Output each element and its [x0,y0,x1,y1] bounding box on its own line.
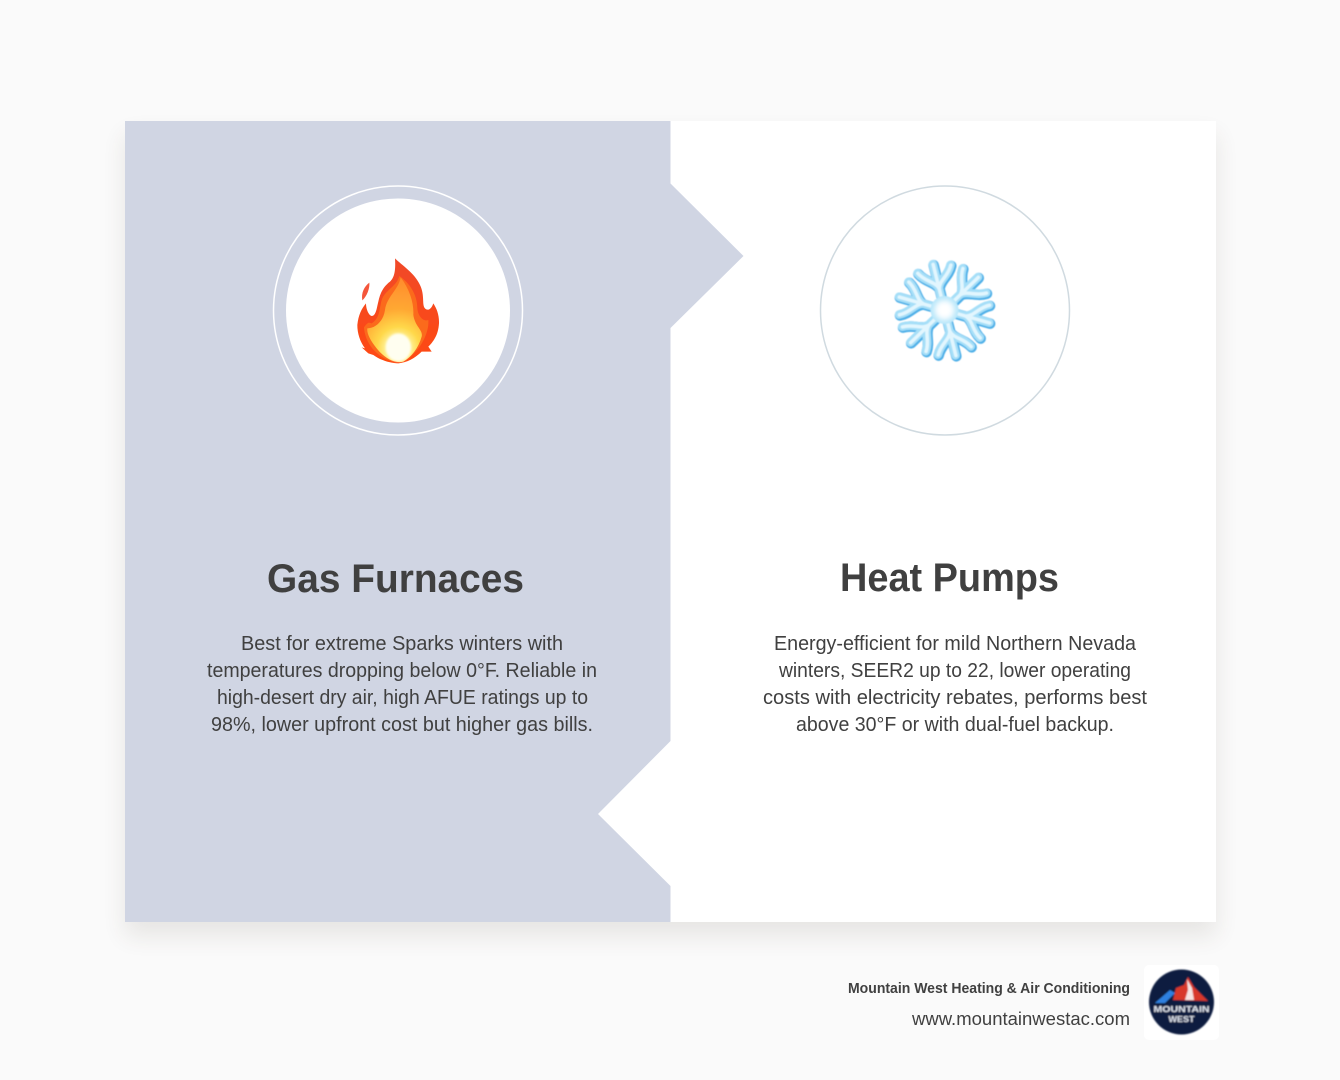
text block: heat pumps description: costs with electricity rebates, performs best [763,687,1147,709]
text block: gas furnaces description: temperatures dropping below 0°F. Reliable in [207,660,597,682]
panel: heat pumps background [125,121,1216,922]
text block: heat pumps description: above 30°F or with dual-fuel backup. [796,714,1114,736]
icon: snowflake in circle [820,186,1070,435]
logo: Mountain West [1144,965,1219,1040]
card shadow [125,135,1216,936]
text block: gas furnaces description [207,633,597,736]
panel: gas furnaces background with arrow and notch [125,121,744,922]
icon: flame in circle [274,186,522,435]
logo: Mountain West: WEST [1168,1015,1195,1024]
logo: Mountain West: MOUNTAIN [1154,1005,1210,1014]
heading: gas furnaces: Gas Furnaces [267,557,524,601]
comparison card [125,121,1216,922]
text block: heat pumps description [763,633,1147,736]
text block: gas furnaces description: 98%, lower upfront cost but higher gas bills. [211,714,593,736]
footer: website: www.mountainwestac.com [911,1009,1130,1029]
footer: company name: Mountain West Heating & Air Conditioning [848,981,1130,997]
heading: heat pumps: Heat Pumps [840,556,1059,600]
text block: gas furnaces description: high-desert dry air, high AFUE ratings up to [217,687,588,709]
text block: heat pumps description: Energy-efficient for mild Northern Nevada [774,633,1137,655]
text block: heat pumps description: winters, SEER2 up to 22, lower operating [778,660,1131,682]
text block: gas furnaces description: Best for extreme Sparks winters with [241,633,563,655]
